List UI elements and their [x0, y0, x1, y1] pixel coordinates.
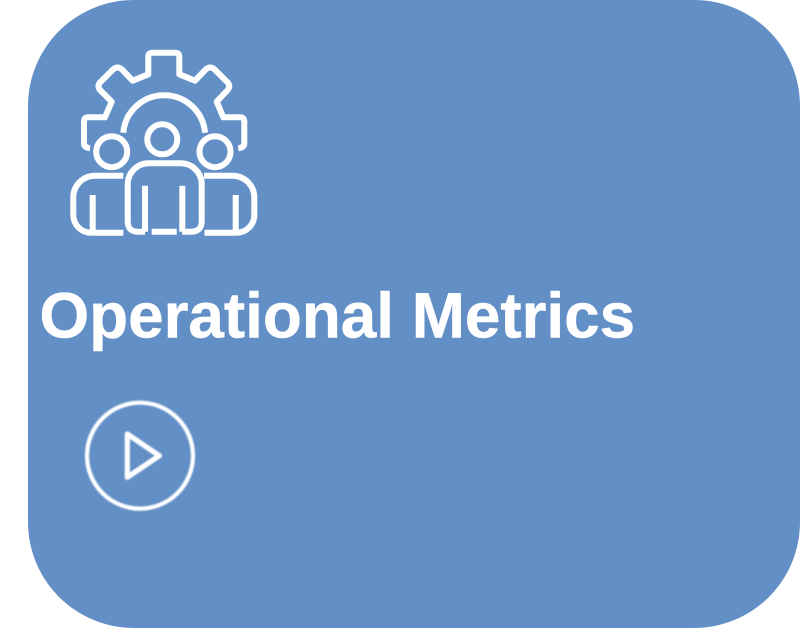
icon: team in front of gear [73, 53, 254, 233]
title: Operational Metrics: Operational Metrics [40, 280, 635, 352]
icon: play button [87, 403, 193, 509]
